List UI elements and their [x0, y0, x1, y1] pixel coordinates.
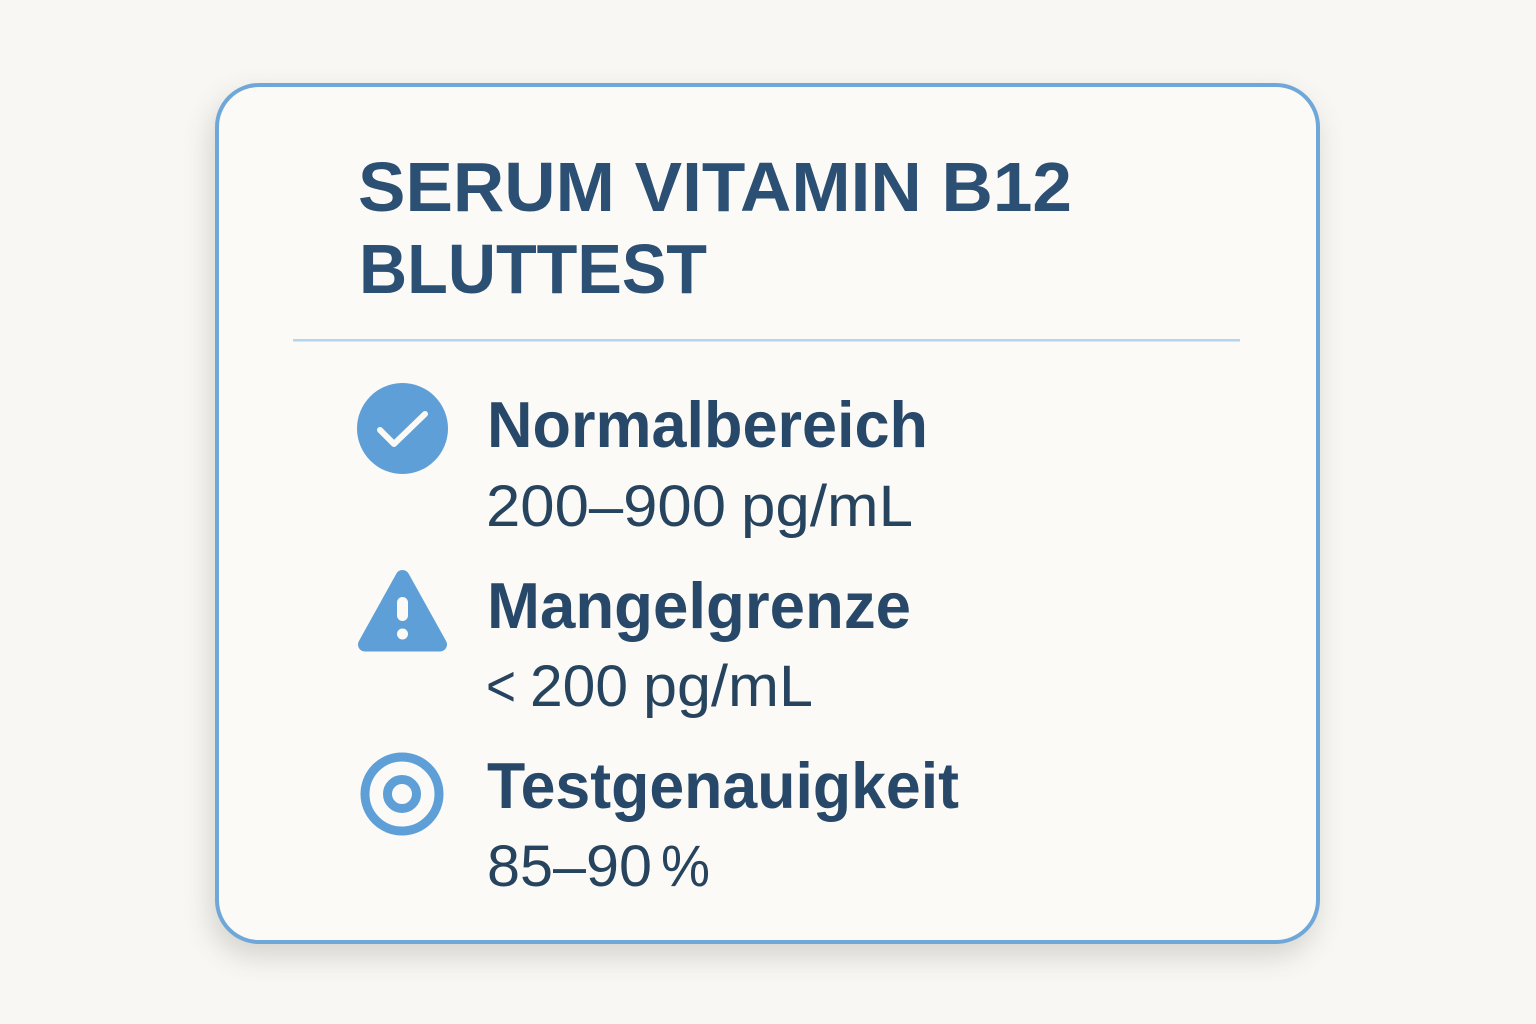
value: deficiency threshold [486, 654, 813, 719]
value: deficiency threshold: < [486, 654, 516, 719]
icon: check circle [357, 383, 448, 474]
heading: Testgenauigkeit: Testgenauigkeit [487, 749, 959, 822]
title: SERUM VITAMIN B12 [358, 148, 1072, 226]
value: deficiency threshold: 200 [530, 654, 628, 719]
value: deficiency threshold: pg/mL [643, 654, 813, 719]
icon: target [365, 757, 439, 831]
heading: Normalbereich: Normalbereich [487, 388, 928, 461]
row: Testgenauigkeit [365, 749, 959, 899]
value: test accuracy: % [661, 834, 710, 899]
value: normal range: pg/mL [741, 474, 913, 539]
value: test accuracy: 85–90 [487, 834, 652, 899]
icon: warning triangle [365, 577, 440, 644]
title [358, 148, 1072, 308]
title: BLUTTEST [359, 230, 707, 308]
value: normal range: 200–900 [486, 474, 726, 539]
row: Mangelgrenze [365, 569, 911, 719]
panel: test card [215, 83, 1320, 944]
row: Normalbereich [357, 383, 928, 539]
heading: Mangelgrenze: Mangelgrenze [487, 569, 911, 642]
value: normal range [486, 474, 913, 539]
